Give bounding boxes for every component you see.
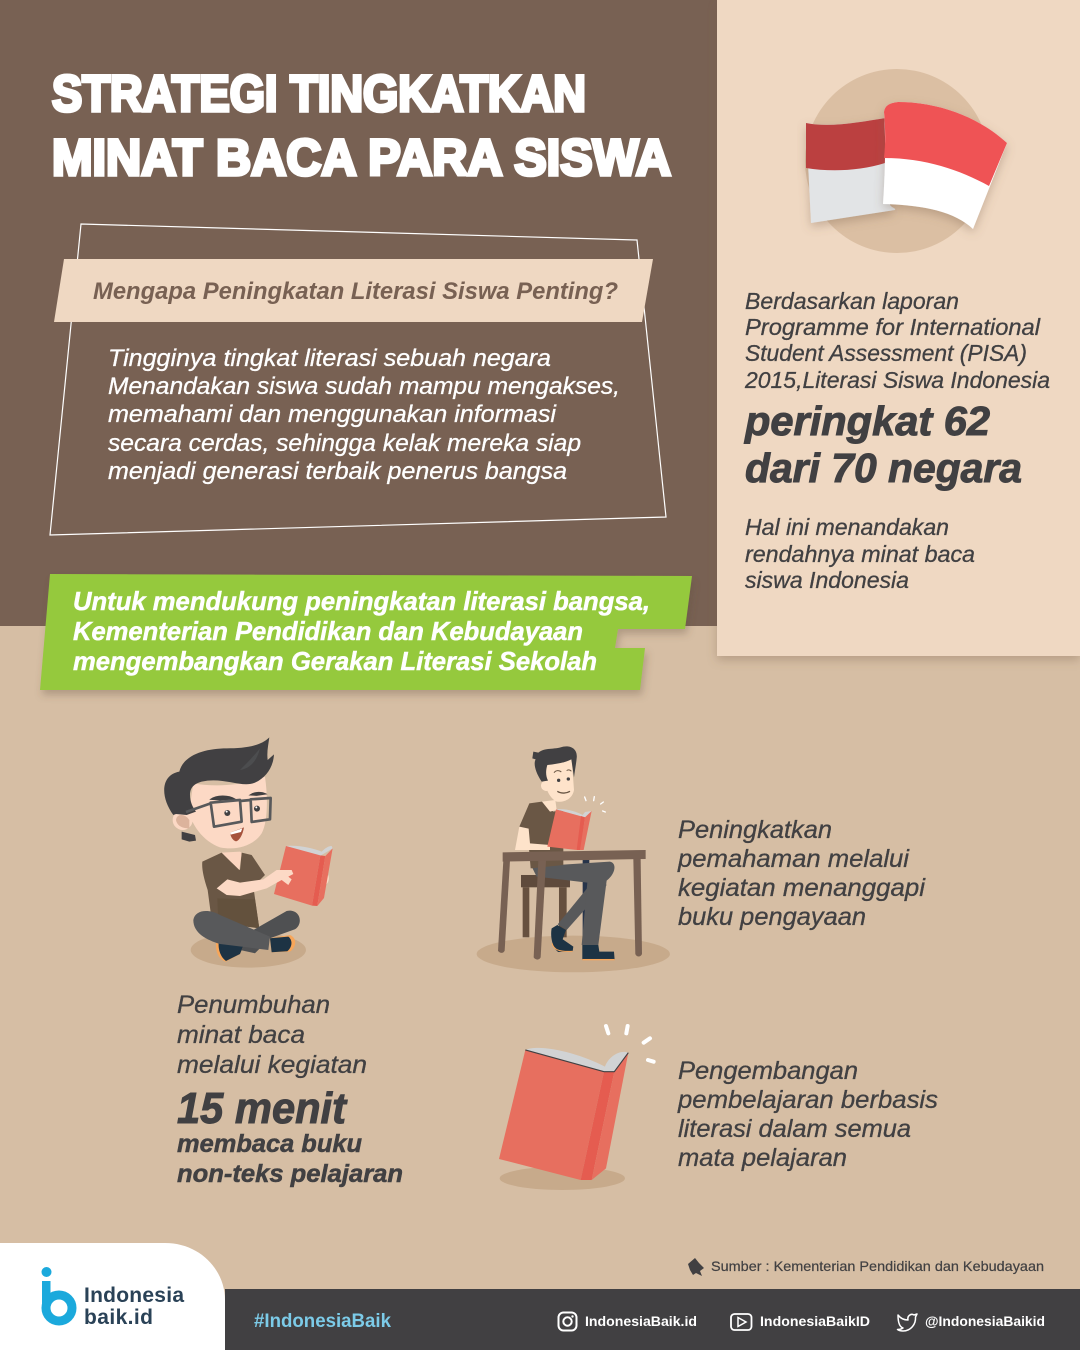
illustration: boy reading cross-legged xyxy=(164,737,333,968)
text: 15 minutes strategy: non-teks pelajaran xyxy=(177,1160,403,1188)
footer bar xyxy=(225,1289,1080,1350)
title: STRATEGI TINGKATKAN xyxy=(52,65,586,122)
text: logo wordmark: baik.id xyxy=(84,1306,153,1329)
text: explanation: secara cerdas, sehingga kelak mereka siap xyxy=(108,430,581,457)
illustration: man reading at desk xyxy=(477,746,670,972)
text: 15 minutes strategy: Penumbuhan xyxy=(177,991,330,1019)
text: comprehension strategy: Peningkatkan xyxy=(678,816,832,844)
text: curriculum strategy: pembelajaran berbasis xyxy=(677,1086,938,1114)
text: curriculum strategy xyxy=(677,1057,938,1172)
text: logo wordmark: Indonesia xyxy=(84,1284,184,1307)
hashtag: #IndonesiaBaik xyxy=(254,1311,391,1332)
text: explanation: Menandakan siswa sudah mampu mengakses, xyxy=(108,373,620,400)
text: explanation xyxy=(108,345,620,485)
text: conclusion xyxy=(745,514,975,593)
text: curriculum strategy: mata pelajaran xyxy=(678,1144,847,1172)
text: comprehension strategy: kegiatan menanggapi xyxy=(678,874,926,902)
callout: green banner: mengembangkan Gerakan Literasi Sekolah xyxy=(73,646,597,676)
text: 15 minutes strategy: 15 menit xyxy=(177,1084,348,1133)
text: explanation: menjadi generasi terbaik penerus bangsa xyxy=(108,458,567,485)
text: 15 minutes strategy: minat baca xyxy=(177,1021,305,1049)
logo panel xyxy=(0,1243,225,1350)
text: rank highlight xyxy=(744,398,1022,491)
panel: PISA facts xyxy=(717,0,1080,656)
icon: open red book xyxy=(499,1026,654,1190)
text: 15 minutes strategy: membaca buku xyxy=(177,1130,362,1158)
text: PISA report intro: Student Assessment (PISA) xyxy=(745,340,1027,366)
social: instagram xyxy=(558,1312,697,1330)
title: MINAT BACA PARA SISWA xyxy=(52,129,671,186)
social: instagram: IndonesiaBaik.id xyxy=(585,1314,697,1329)
panel: why literacy matters xyxy=(50,224,666,535)
callout: green banner xyxy=(40,574,692,690)
text: PISA report intro: 2015,Literasi Siswa Indonesia xyxy=(744,367,1050,393)
text: explanation: memahami dan menggunakan informasi xyxy=(108,401,557,428)
text: curriculum strategy: Pengembangan xyxy=(678,1057,858,1085)
text: curriculum strategy: literasi dalam semua xyxy=(678,1115,911,1143)
text: comprehension strategy xyxy=(677,816,926,931)
text: PISA report intro xyxy=(744,288,1050,393)
source credit: Sumber : Kementerian Pendidikan dan Kebudayaan xyxy=(711,1258,1044,1274)
callout: green banner: Untuk mendukung peningkatan literasi bangsa, xyxy=(73,586,650,616)
text: conclusion: rendahnya minat baca xyxy=(745,541,975,567)
title xyxy=(52,65,671,186)
social: twitter: @IndonesiaBaikid xyxy=(925,1314,1045,1329)
text: 15 minutes strategy: melalui kegiatan xyxy=(177,1051,367,1079)
text: comprehension strategy: pemahaman melalui xyxy=(677,845,910,873)
heading band xyxy=(54,259,653,322)
text: comprehension strategy: buku pengayaan xyxy=(678,903,866,931)
callout: green banner: Kementerian Pendidikan dan Kebudayaan xyxy=(73,616,583,646)
text: rank highlight: dari 70 negara xyxy=(745,445,1022,491)
text: logo wordmark xyxy=(84,1284,184,1329)
social: youtube: IndonesiaBaikID xyxy=(760,1314,870,1329)
background: upper brown panel xyxy=(0,0,717,626)
text: 15 minutes strategy xyxy=(177,991,403,1188)
text: rank highlight: peringkat 62 xyxy=(744,398,990,444)
text: explanation: Tingginya tingkat literasi sebuah negara xyxy=(108,345,551,372)
social: twitter xyxy=(898,1314,1045,1331)
text: conclusion: siswa Indonesia xyxy=(745,567,909,593)
heading band: Mengapa Peningkatan Literasi Siswa Penting? xyxy=(93,278,618,305)
text: PISA report intro: Berdasarkan laporan xyxy=(745,288,959,314)
icon: Indonesia Baik logo xyxy=(42,1267,72,1321)
icon: Indonesian flag xyxy=(805,69,1007,253)
text: conclusion: Hal ini menandakan xyxy=(745,514,949,540)
text: PISA report intro: Programme for International xyxy=(745,314,1041,340)
